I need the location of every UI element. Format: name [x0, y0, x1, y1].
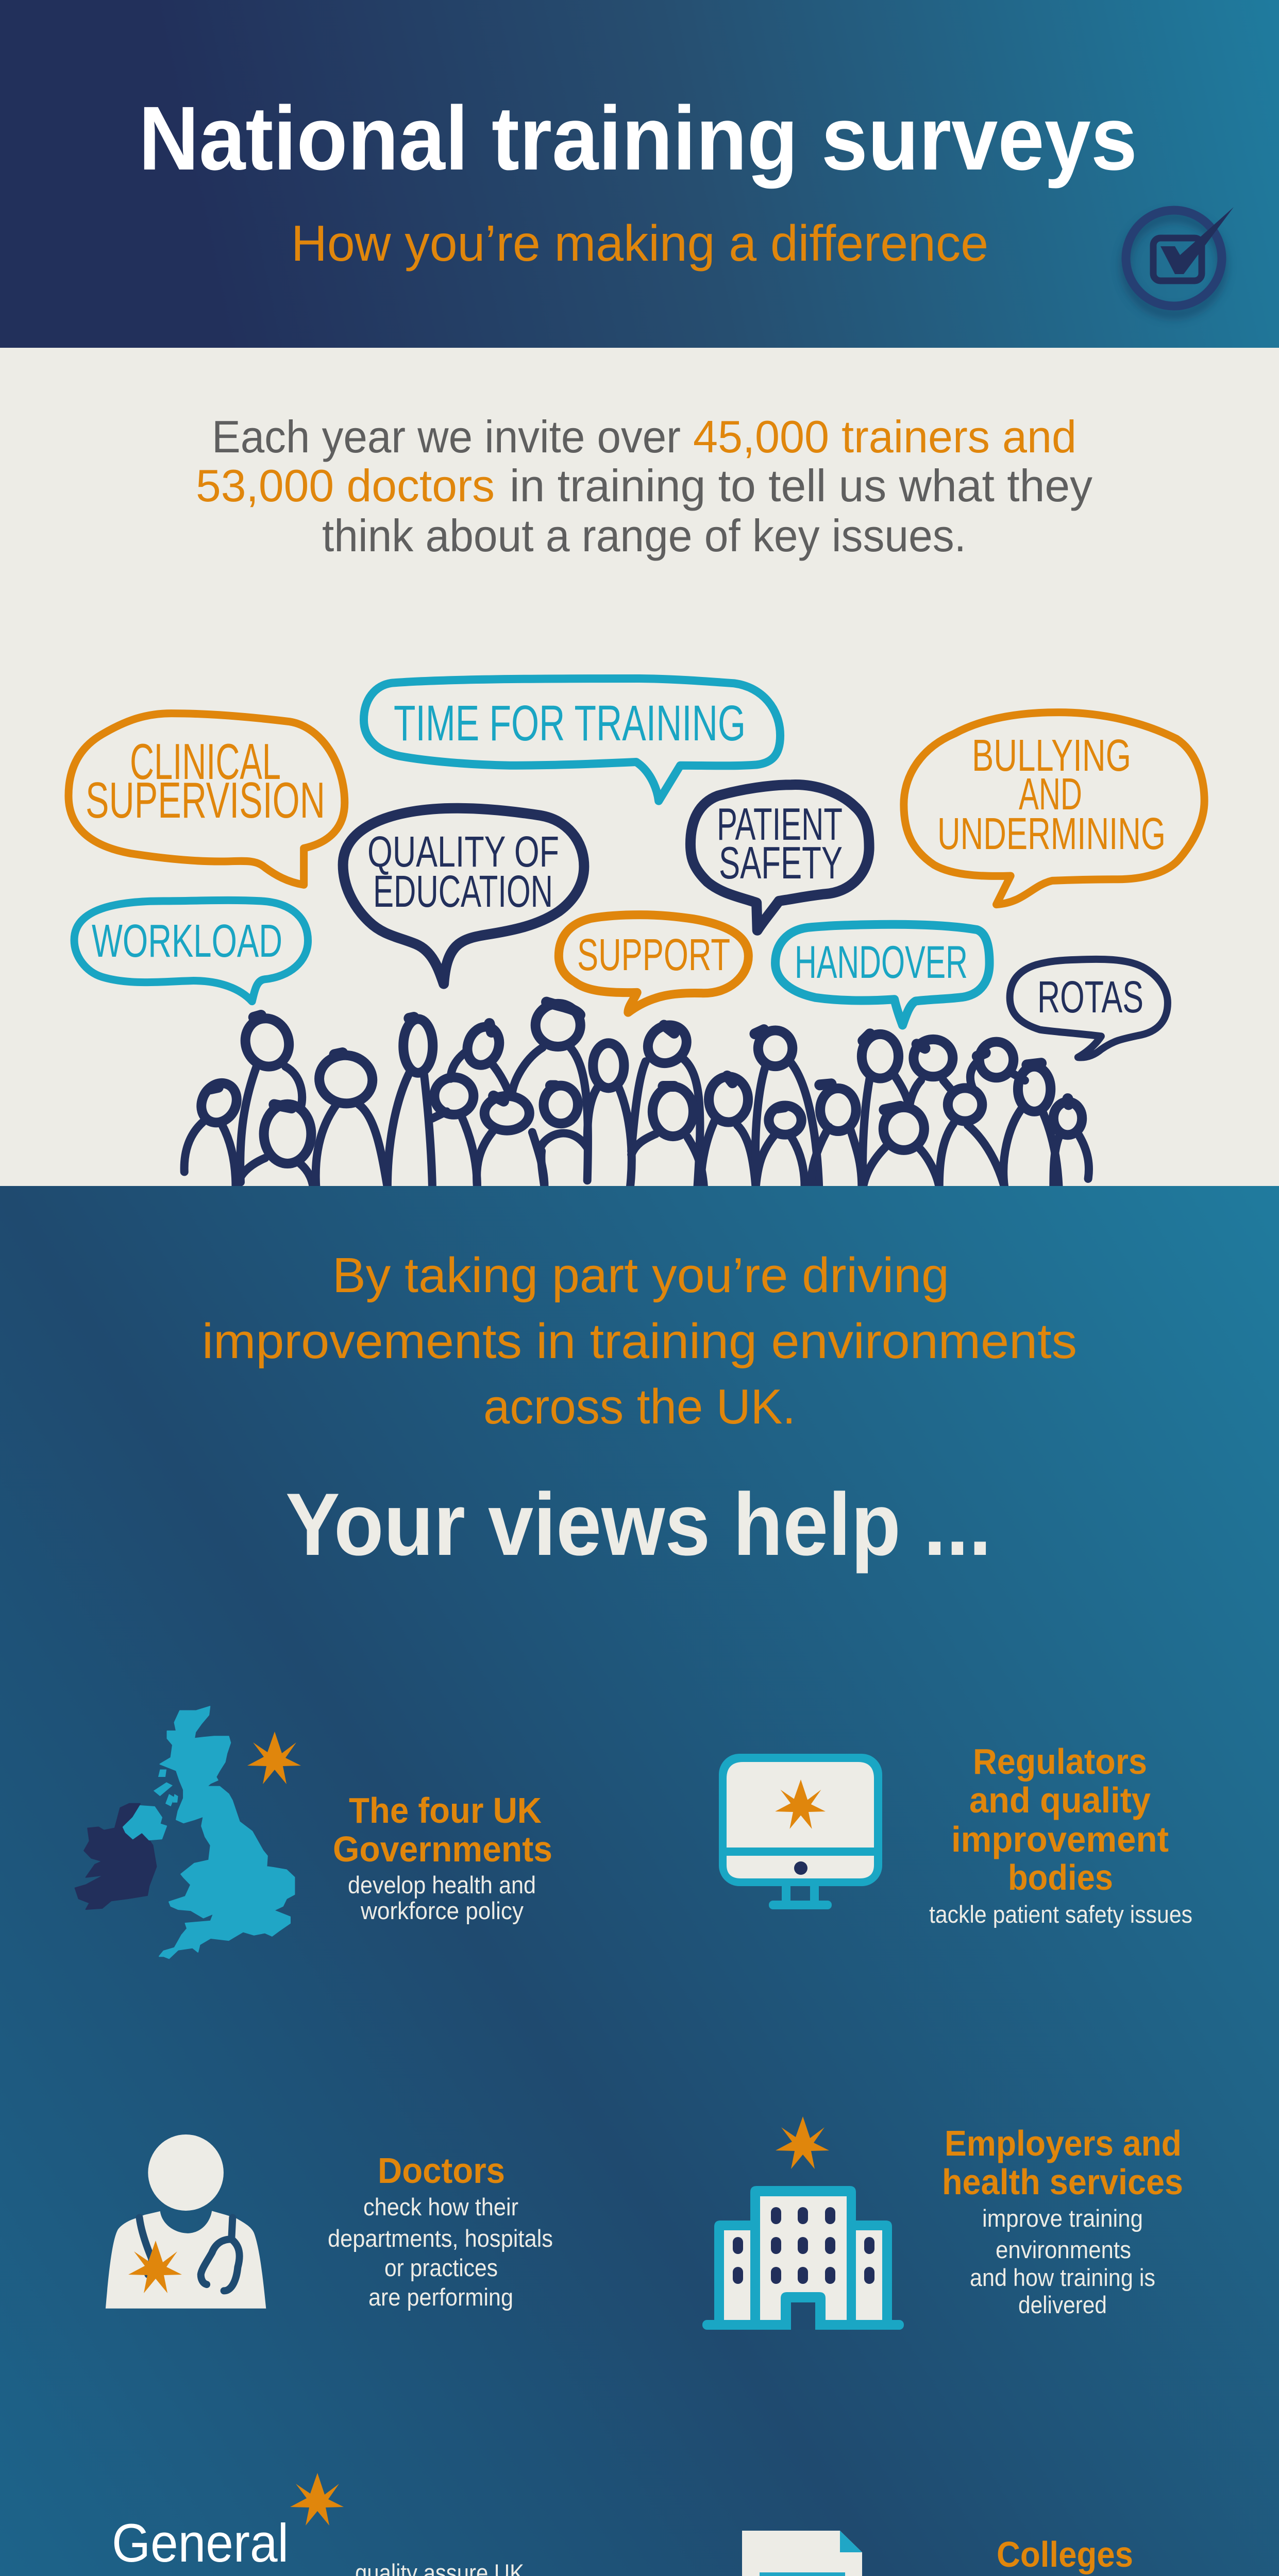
item heading: Colleges: [997, 2534, 1133, 2574]
speech bubble labels: TIME FOR TRAINING: [394, 695, 746, 751]
item description: environments: [996, 2236, 1131, 2263]
intro statement: improvements in training environments: [202, 1314, 1077, 1369]
item description: workforce policy: [360, 1897, 524, 1924]
panel: header: [0, 0, 1279, 348]
item: the four UK governments: [75, 1706, 552, 1958]
item heading: [942, 2123, 1183, 2202]
item heading: bodies: [1008, 1857, 1113, 1897]
icon: star: [247, 1732, 301, 1784]
icon: map of UK and Ireland: [75, 1706, 294, 1958]
item heading: and quality: [969, 1780, 1151, 1820]
item heading: The four UK: [349, 1790, 542, 1831]
speech bubble labels: BULLYING: [972, 731, 1131, 781]
title: National training surveys: [139, 88, 1137, 189]
intro statement: across the UK.: [483, 1379, 796, 1434]
speech bubble labels: SUPPORT: [577, 930, 730, 980]
item: employers and health services: [702, 2116, 1183, 2330]
bubble: support: [559, 915, 748, 1012]
icon: star: [128, 2241, 182, 2293]
bubble: time for training: [364, 679, 780, 801]
bubble: rotas: [1010, 959, 1168, 1058]
icon: doctor with stethoscope: [106, 2134, 266, 2309]
item description: and how training is: [970, 2264, 1155, 2291]
speech bubble labels: ROTAS: [1037, 972, 1143, 1022]
item description: [348, 1871, 536, 1924]
intro paragraph: [196, 411, 1092, 561]
item description: improve training: [982, 2205, 1143, 2232]
item description: [328, 2193, 553, 2311]
intro paragraph: Each year we invite over: [212, 411, 681, 462]
item heading: health services: [942, 2162, 1183, 2202]
item heading: [333, 1790, 552, 1869]
item: doctors: [106, 2134, 553, 2311]
bubble: clinical supervision: [69, 714, 345, 885]
speech bubble labels: WORKLOAD: [92, 916, 282, 967]
item description: check how their: [363, 2193, 518, 2221]
item description: or practices: [384, 2254, 498, 2281]
item heading: [951, 1741, 1169, 1897]
item description: are performing: [368, 2283, 513, 2311]
intro paragraph: 53,000 doctors: [196, 460, 495, 511]
bubble: bullying and undermining: [904, 713, 1204, 905]
icon: star: [290, 2473, 344, 2526]
speech bubble labels: HANDOVER: [795, 936, 968, 988]
crowd of people illustration: [184, 1002, 1089, 1188]
speech bubble labels: QUALITY OF: [367, 827, 559, 876]
speech bubble labels: EDUCATION: [373, 867, 553, 917]
icon: star: [775, 1780, 826, 1829]
item: colleges and faculties: [742, 2531, 1192, 2576]
subtitle: How you’re making a difference: [291, 215, 988, 272]
item heading: Governments: [333, 1829, 552, 1869]
item description: [970, 2205, 1155, 2318]
bubble: quality of education: [343, 808, 584, 984]
panel background: [0, 1186, 1279, 2576]
item heading: Employers and: [945, 2123, 1182, 2163]
speech bubble labels: PATIENT: [717, 799, 843, 850]
speech bubble labels: [86, 695, 1166, 1022]
icon: computer monitor: [719, 1754, 882, 1909]
speech bubble labels: AND: [1019, 769, 1082, 819]
item heading: Regulators: [973, 1741, 1147, 1782]
icon: star: [776, 2116, 829, 2169]
item description: departments, hospitals: [328, 2225, 553, 2252]
intro statement: By taking part you’re driving: [332, 1248, 949, 1303]
item description: tackle patient safety issues: [929, 1901, 1192, 1928]
item description: delivered: [1018, 2291, 1107, 2318]
bubble: patient safety: [691, 785, 869, 930]
speech bubble labels: UNDERMINING: [937, 809, 1166, 859]
bubble: workload: [74, 900, 308, 1002]
panel background: [0, 348, 1279, 1190]
intro statement: [202, 1248, 1077, 1434]
intro paragraph: 45,000 trainers and: [693, 411, 1076, 462]
section heading: Your views help ...: [285, 1475, 991, 1574]
item: regulators: [719, 1741, 1192, 1928]
item: general medical council: [112, 2473, 530, 2576]
icon: certificate with seal: [742, 2531, 862, 2576]
speech bubble labels: SUPERVISION: [86, 772, 325, 828]
intro paragraph: think about a range of key issues.: [322, 510, 966, 561]
speech bubble labels: CLINICAL: [130, 733, 281, 790]
intro paragraph: in training to tell us what they: [510, 460, 1092, 511]
panel: survey invitation and topics: [0, 348, 1279, 1190]
icon: hospital building: [702, 2186, 904, 2330]
item description: develop health and: [348, 1871, 536, 1899]
bubble: handover: [776, 924, 989, 1025]
item heading: Doctors: [378, 2150, 505, 2191]
speech bubble outlines: [69, 679, 1204, 1058]
panel: your views help: [0, 1186, 1279, 2576]
item heading: improvement: [951, 1819, 1169, 1859]
logo: General Medical Council: General: [112, 2513, 289, 2573]
header background: [0, 0, 1279, 348]
icon: tick badge: [1125, 207, 1234, 314]
speech bubble labels: SAFETY: [719, 837, 843, 888]
